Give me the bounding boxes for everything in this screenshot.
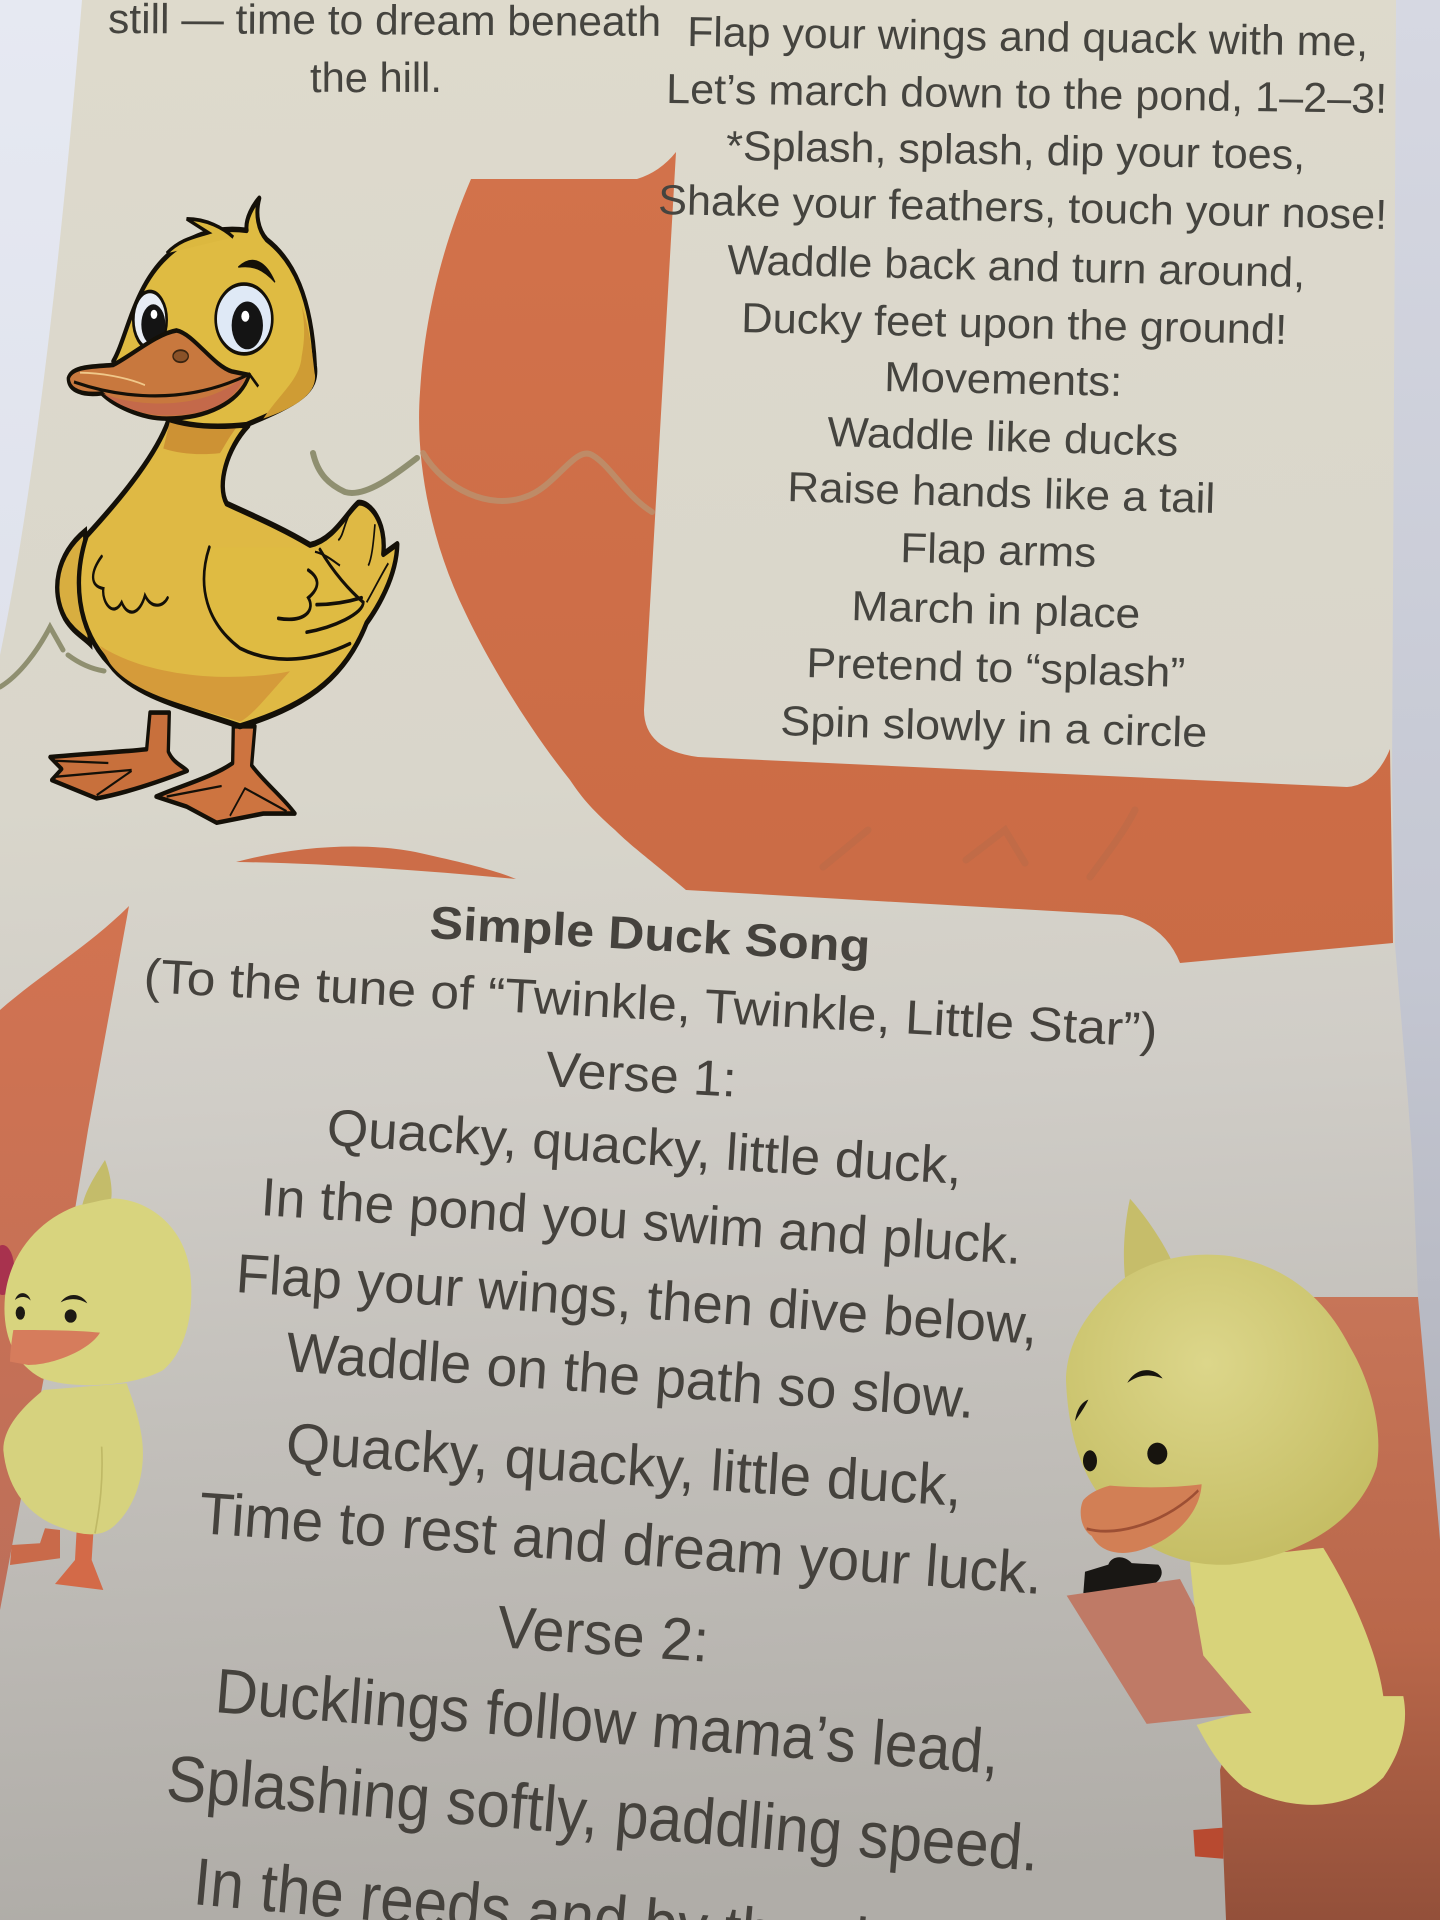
large duck body (1190, 1548, 1405, 1805)
text block: action song and movements: Spin slowly in a circle (780, 697, 1208, 756)
faint squiggle on the lower orange band (823, 810, 1135, 877)
text block: verse 2: Ducklings follow mama’s lead, (213, 1656, 1002, 1788)
text block: verse 1: Verse 1: (544, 1041, 738, 1108)
duck legs and feet (50, 713, 295, 823)
text block: action song and movements: Ducky feet upon the ground! (741, 294, 1288, 353)
text block: action song and movements (658, 8, 1388, 756)
text block: action song and movements: Shake your feathers, touch your nose! (658, 176, 1388, 238)
panel: right orange shape (1220, 1297, 1440, 1920)
toy duck body (3, 1383, 143, 1534)
text block: action song and movements: Waddle back and turn around, (727, 236, 1306, 296)
text block: action song and movements: Waddle like ducks (827, 408, 1179, 465)
text block: verse 1: In the pond you swim and pluck. (259, 1167, 1024, 1276)
text block: verse 1: Quacky, quacky, little duck, (284, 1411, 964, 1519)
toy duck body fold (95, 1447, 102, 1533)
clipboard (1067, 1579, 1252, 1724)
large duck head (1066, 1255, 1378, 1565)
duck belly shade (100, 646, 290, 722)
duck back wing (57, 531, 90, 644)
duck body (79, 421, 397, 726)
large duck beak (1081, 1484, 1202, 1553)
text block: end of previous poem (108, 0, 661, 101)
icon: large toy duck with clipboard on the right (1066, 1199, 1405, 1859)
toy duck crest (82, 1160, 112, 1208)
duck beak highlight and nostril (80, 350, 188, 385)
panel: left orange shape (0, 906, 129, 1610)
text block: action song and movements: Pretend to “splash” (806, 639, 1186, 696)
large duck mouth line (1087, 1490, 1198, 1531)
orange sliver under the cartoon duck (236, 847, 516, 879)
text block: verse 1: Quacky, quacky, little duck, (325, 1099, 964, 1196)
duck head tuft (167, 219, 233, 253)
green-grey squiggle behind the cartoon duck tail (313, 453, 417, 493)
decorative squiggle on the orange band (423, 453, 652, 512)
text block: verse 2: Splashing softly, paddling speed. (164, 1741, 1042, 1885)
duck smile line (74, 374, 258, 396)
toy duck eyes and brows (15, 1293, 87, 1323)
duck lower lip (103, 375, 245, 415)
toy duck head (4, 1198, 191, 1385)
text block: action song and movements: Flap your wings and quack with me, (687, 8, 1368, 65)
toy duck beak (10, 1330, 100, 1365)
text block: action song and movements: Flap arms (900, 524, 1097, 576)
text block: verse 2 (164, 1593, 1042, 1920)
large duck crest (1124, 1199, 1172, 1278)
heading: Simple Duck Song: Simple Duck Song (428, 896, 872, 972)
large duck foot (1193, 1828, 1223, 1859)
duck eye left (133, 291, 167, 348)
text block: verse 1: Waddle on the path so slow. (284, 1320, 977, 1430)
text block: action song and movements: *Splash, splash, dip your toes, (726, 122, 1306, 178)
duck cheek shade (263, 306, 315, 419)
duck chest feathers (93, 556, 168, 612)
text block: action song and movements: Let’s march down to the pond, 1–2–3! (666, 65, 1387, 122)
text block: verse 2: Verse 2: (495, 1593, 711, 1675)
text block: verse 1 (197, 1041, 1045, 1607)
icon: small toy duck on the left (0, 1160, 191, 1590)
text block: verse 1: Time to rest and dream your luck. (197, 1480, 1045, 1607)
text block: end of previous poem: the hill. (310, 54, 442, 101)
toy duck feet (10, 1528, 103, 1590)
toy duck pink accent (0, 1245, 14, 1295)
duck eyebrow (238, 261, 275, 282)
duck wing (204, 547, 363, 659)
duck head (113, 198, 315, 426)
duck neck shade (163, 421, 240, 454)
icon: cartoon duck (50, 198, 397, 823)
panel: large orange band framing the song text (419, 152, 1393, 963)
duck beak (68, 330, 249, 419)
duck eye right (216, 284, 272, 354)
text block: action song and movements: Raise hands like a tail (787, 463, 1216, 522)
clipboard clip (1083, 1557, 1162, 1593)
text block: verse 1: Flap your wings, then dive below, (234, 1242, 1040, 1356)
green-grey squiggle at left of the cartoon duck (0, 627, 104, 687)
duck tail feather lines (315, 513, 388, 602)
subheading: tune note: (To the tune of “Twinkle, Twinkle, Little Star”) (142, 950, 1159, 1058)
text block: action song and movements: March in place (851, 582, 1141, 637)
background strip right of the sheet (1370, 0, 1440, 1920)
text block: action song and movements: Movements: (884, 353, 1123, 405)
large duck eyes and brows (1075, 1370, 1167, 1471)
